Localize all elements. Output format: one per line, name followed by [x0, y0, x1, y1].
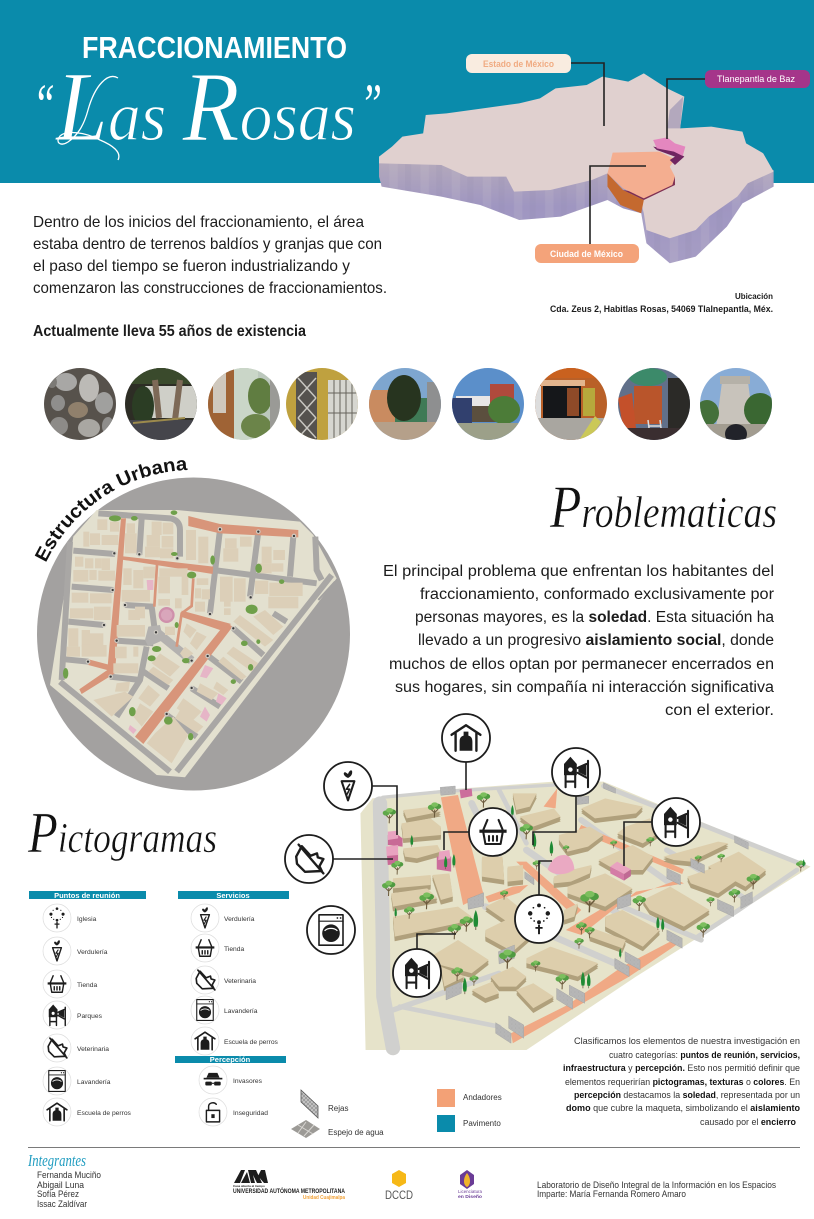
title: FRACCIONAMIENTO [82, 30, 347, 65]
logo: UAM: Casa abierta al tiempo [233, 1184, 265, 1188]
legend: andadores: Andadores [463, 1093, 502, 1102]
legend: servicios: Servicios [216, 891, 250, 900]
photo: stones [44, 368, 116, 440]
3D scene model [333, 762, 811, 1050]
lab credits: Laboratorio de Diseño Integral de la Información en los Espacios [537, 1180, 776, 1191]
problem paragraph: muchos de ellos optan por permanecer encerrados en [389, 656, 774, 673]
classification text: domo que cubre la maqueta, simbolizando el aislamiento [566, 1103, 800, 1114]
logo: UAM [233, 1170, 345, 1201]
classification text [563, 1036, 800, 1128]
location [550, 291, 773, 314]
intro text [33, 214, 387, 297]
photo: trees and wall [125, 368, 197, 440]
photo: gate [286, 368, 358, 440]
buildings [391, 795, 766, 1013]
problem paragraph: sus hogares, sin compañía ni interacción significativa [395, 679, 774, 696]
legend: percepcion: Inseguridad [233, 1110, 268, 1117]
logo: licenciatura en diseno: en Diseño [458, 1194, 482, 1199]
title: Las Rosas [54, 51, 356, 162]
logo: UAM: UNIVERSIDAD AUTÓNOMA METROPOLITANA [233, 1186, 345, 1195]
legend: servicios: Verdulería [224, 916, 255, 923]
label: Estado de Mexico [466, 54, 571, 73]
team credits: Sofía Pérez [37, 1189, 79, 1200]
legend: espejo de agua: Espejo de agua [328, 1128, 384, 1137]
header band [0, 0, 814, 183]
classification text: causado por el encierro [700, 1117, 796, 1128]
intro text: el paso del tiempo se fueron industrializando y [33, 258, 350, 275]
logo: DCCD: DCCD [385, 1188, 413, 1202]
team credits: Issac Zaldívar [37, 1199, 87, 1210]
legend: espejo de agua [291, 1120, 384, 1138]
connector lines [333, 762, 652, 949]
classification text: Clasificamos los elementos de nuestra investigación en [574, 1036, 800, 1047]
legend: puntos de reunion [29, 891, 146, 1126]
legend: puntos de reunion: Tienda [77, 982, 97, 989]
map: state of Mexico [379, 63, 774, 263]
heading: Pictogramas: Pictogramas [27, 800, 217, 865]
classification text: percepción destacamos la soledad, representada por un [574, 1090, 800, 1101]
building blocks [67, 519, 303, 763]
ground [360, 782, 811, 1050]
trees [63, 510, 284, 740]
heading: Problematicas: Problematicas [549, 474, 777, 540]
legend: servicios: Veterinaria [224, 978, 256, 985]
legend: andadores [437, 1089, 502, 1107]
legend: servicios [178, 891, 289, 1055]
big icon: veterinaria [285, 835, 333, 883]
team credits: Fernanda Muciño [37, 1170, 101, 1181]
problem paragraph [383, 563, 774, 719]
Ciudad de Mexico side [607, 173, 644, 213]
problem paragraph: con el exterior. [665, 702, 774, 719]
logo: licenciatura en diseno [458, 1170, 482, 1199]
big icon: parque north [552, 748, 600, 796]
heading: Estructura Urbana (curved): Estructura Urbana [34, 460, 188, 562]
problem paragraph: El principal problema que enfrentan los habitantes del [383, 563, 774, 580]
title: ” [360, 72, 382, 137]
legend: servicios: Tienda [224, 946, 244, 953]
logo: DCCD [385, 1170, 413, 1202]
big icon: lavanderia [307, 906, 355, 954]
Tlalnepantla [653, 147, 684, 165]
legend: puntos de reunion: Parques [77, 1013, 103, 1020]
label: Ciudad de Mexico [535, 244, 639, 263]
legend: pavimento [437, 1115, 501, 1132]
roads [380, 785, 804, 1048]
big icon: escuela de perros [442, 714, 490, 762]
photo: tower [700, 368, 772, 440]
legend: servicios: Lavandería [224, 1008, 258, 1015]
team credits: Abigail Luna [37, 1180, 85, 1191]
intro text: estaba dentro de terrenos baldíos y granjas que con [33, 236, 382, 253]
title: “ [33, 72, 55, 137]
legend: puntos de reunion: Iglesia [77, 916, 97, 923]
team credits: Integrantes [27, 1151, 86, 1170]
location: Ubicación [735, 291, 773, 301]
legend: puntos de reunion: Puntos de reunión [54, 891, 120, 900]
state top surface [379, 73, 774, 238]
classification text: cuatro categorías: puntos de reunión, servicios, [609, 1050, 800, 1061]
legend: puntos de reunion: Verdulería [77, 949, 108, 956]
legend: pavimento: Pavimento [463, 1119, 501, 1128]
pink points [128, 580, 227, 734]
circular map: estructura urbana [37, 478, 350, 790]
legend: rejas [301, 1090, 348, 1118]
photo: door and vine [208, 368, 280, 440]
classification text: elementos requerirían pictogramas, texturas o colores. En [565, 1077, 800, 1088]
map ground [50, 510, 337, 777]
logo: UAM: Unidad Cuajimalpa [303, 1195, 345, 1201]
label: Tlalnepantla de Baz [705, 70, 810, 88]
fences [440, 783, 752, 1043]
existence heading: Actualmente lleva 55 años de existencia [33, 323, 306, 340]
big icon: parque east [652, 798, 700, 846]
legend: percepcion: Percepción [210, 1055, 251, 1064]
pedestrian paths [441, 788, 684, 1043]
legend: puntos de reunion: Veterinaria [77, 1046, 109, 1053]
Ciudad de Mexico top [607, 152, 675, 198]
lab credits: Imparte: María Fernanda Romero Amaro [537, 1189, 686, 1200]
label: Ciudad de Mexico: Ciudad de México [550, 249, 623, 260]
intro text: Dentro de los inicios del fraccionamiento, el área [33, 214, 364, 231]
legend: rejas: Rejas [328, 1104, 348, 1113]
photo: playground [618, 368, 690, 440]
pedestrian paths [79, 516, 298, 744]
classification text: infraestructura y percepción. Esto nos permitió definir que [563, 1063, 800, 1074]
team credits [27, 1151, 101, 1210]
state extrusion [379, 160, 774, 263]
label: Estado de Mexico: Estado de México [483, 59, 554, 70]
big icon: verduleria [324, 762, 372, 810]
big icon: iglesia [515, 895, 563, 943]
problem paragraph: llevado a un progresivo aislamiento social, donde [418, 632, 774, 649]
label: Tlalnepantla de Baz: Tlanepantla de Baz [717, 74, 795, 85]
photo strip [44, 368, 776, 444]
big icon: parque south [393, 949, 441, 997]
location: Cda. Zeus 2, Habitlas Rosas, 54069 Tlalnepantla, Méx. [550, 304, 773, 314]
intro text: comenzaron las construcciones de fraccionamientos. [33, 280, 387, 297]
logo: licenciatura en diseno: Licenciatura [458, 1189, 482, 1194]
legend: servicios: Escuela de perros [224, 1039, 279, 1046]
street nodes [87, 528, 295, 715]
photo: shop [535, 368, 607, 440]
legend: percepcion [175, 1055, 286, 1126]
legend: puntos de reunion: Escuela de perros [77, 1110, 132, 1117]
trees [382, 792, 806, 994]
problem paragraph: fraccionamiento, conformado exclusivamente por [420, 586, 774, 603]
pink elements [386, 789, 631, 881]
legend: puntos de reunion: Lavandería [77, 1079, 111, 1086]
problem paragraph: personas mayores, es la soledad. Esta situación ha [415, 609, 774, 626]
photo: street with plants [452, 368, 524, 440]
photo: hedge [369, 368, 441, 440]
lab credits [537, 1180, 776, 1200]
legend: percepcion: Invasores [233, 1078, 263, 1085]
big icon: tienda [469, 808, 517, 856]
